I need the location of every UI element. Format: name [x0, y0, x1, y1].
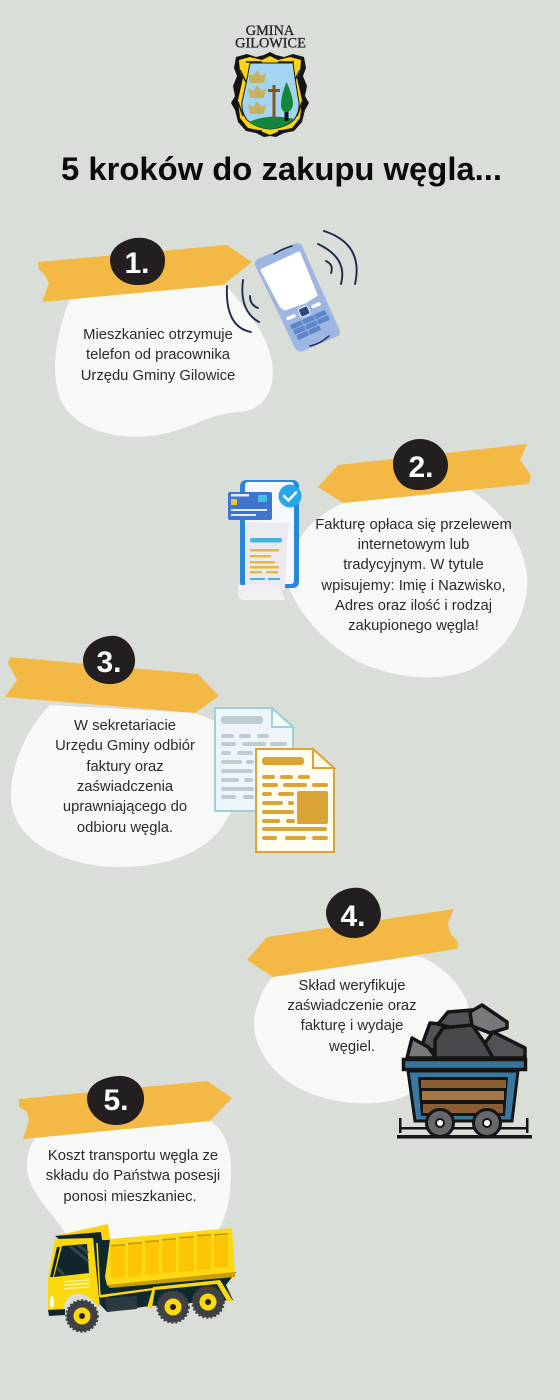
- ribbon: step 4: [247, 909, 458, 977]
- panel: step 4: [247, 888, 532, 1138]
- text: step 3 description: uprawniającego do: [63, 799, 187, 815]
- blob: step 5 background: [27, 1121, 231, 1240]
- text: step 4 description: węgiel.: [328, 1039, 375, 1055]
- ribbon: step 2: [318, 444, 531, 503]
- text: step 1 description: telefon od pracownika: [86, 347, 231, 363]
- ribbon: step 3: [5, 657, 219, 713]
- icon: two documents: [215, 708, 334, 852]
- badge: number 2: [393, 439, 448, 490]
- text: step 2 description: tradycyjnym. W tytule: [343, 557, 484, 573]
- blob: step 2 background: [289, 490, 527, 677]
- text: step 4 description: zaświadczenie oraz: [287, 998, 417, 1014]
- logo: Gmina Gilowice coat of arms: GILOWICE: [235, 36, 306, 52]
- panel: step 3: [5, 636, 334, 867]
- icon: invoice with payment card: [228, 480, 302, 600]
- blob: step 1 background: [55, 285, 273, 437]
- text: step 1 description: Urzędu Gminy Gilowice: [81, 368, 235, 384]
- ribbon: step 5: [19, 1081, 232, 1139]
- text: step 5 description: Koszt transportu węgla ze: [48, 1148, 218, 1164]
- text: step 4 description: Skład weryfikuje: [299, 978, 405, 994]
- badge: number 5: 5.: [103, 1084, 129, 1117]
- title: 5 kroków do zakupu węgla...: [61, 151, 502, 187]
- blob: step 3 background: [11, 705, 244, 867]
- badge: number 3: 3.: [96, 646, 122, 679]
- panel: step 1: [38, 231, 357, 437]
- blob: step 4 background: [254, 956, 468, 1103]
- text: step 5 description: ponosi mieszkaniec.: [63, 1189, 197, 1205]
- ribbon: step 1: [38, 245, 252, 302]
- badge: number 4: [326, 888, 381, 938]
- text: step 2 description: Fakturę opłaca się przelewem: [315, 517, 512, 533]
- logo: Gmina Gilowice coat of arms: [231, 23, 309, 137]
- text: step 3 description: odbioru węgla.: [77, 820, 173, 836]
- icon: yellow dump truck: [48, 1224, 236, 1332]
- badge: number 3: [83, 636, 135, 684]
- icon: ringing mobile phone: [227, 231, 357, 352]
- panel: step 2: [228, 439, 531, 677]
- text: step 3 description: Urzędu Gminy odbiór: [55, 738, 195, 754]
- panel: step 5: [19, 1076, 236, 1332]
- text: step 5 description: składu do Państwa posesji: [46, 1168, 220, 1184]
- badge: number 4: 4.: [340, 900, 366, 933]
- badge: number 5: [87, 1076, 144, 1125]
- text: step 3 description: zaświadczenia: [77, 779, 174, 795]
- logo: Gmina Gilowice coat of arms: GMINA: [246, 23, 295, 39]
- text: step 2 description: zakupionego węgla!: [348, 618, 479, 634]
- text: step 1 description: Mieszkaniec otrzymuje: [83, 327, 233, 343]
- badge: number 1: [110, 238, 165, 285]
- badge: number 2: 2.: [408, 451, 434, 484]
- icon: coal mine cart: [397, 1005, 532, 1138]
- text: step 3 description: faktury oraz: [86, 759, 164, 775]
- badge: number 1: 1.: [124, 247, 150, 280]
- text: step 2 description: Adres oraz ilość i rodzaj: [335, 598, 492, 614]
- text: step 3 description: W sekretariacie: [74, 718, 176, 734]
- text: step 2 description: wpisujemy: Imię i Nazwisko,: [320, 578, 506, 594]
- text: step 2 description: internetowym lub: [358, 537, 469, 553]
- text: step 4 description: fakturę i wydaje: [301, 1018, 403, 1034]
